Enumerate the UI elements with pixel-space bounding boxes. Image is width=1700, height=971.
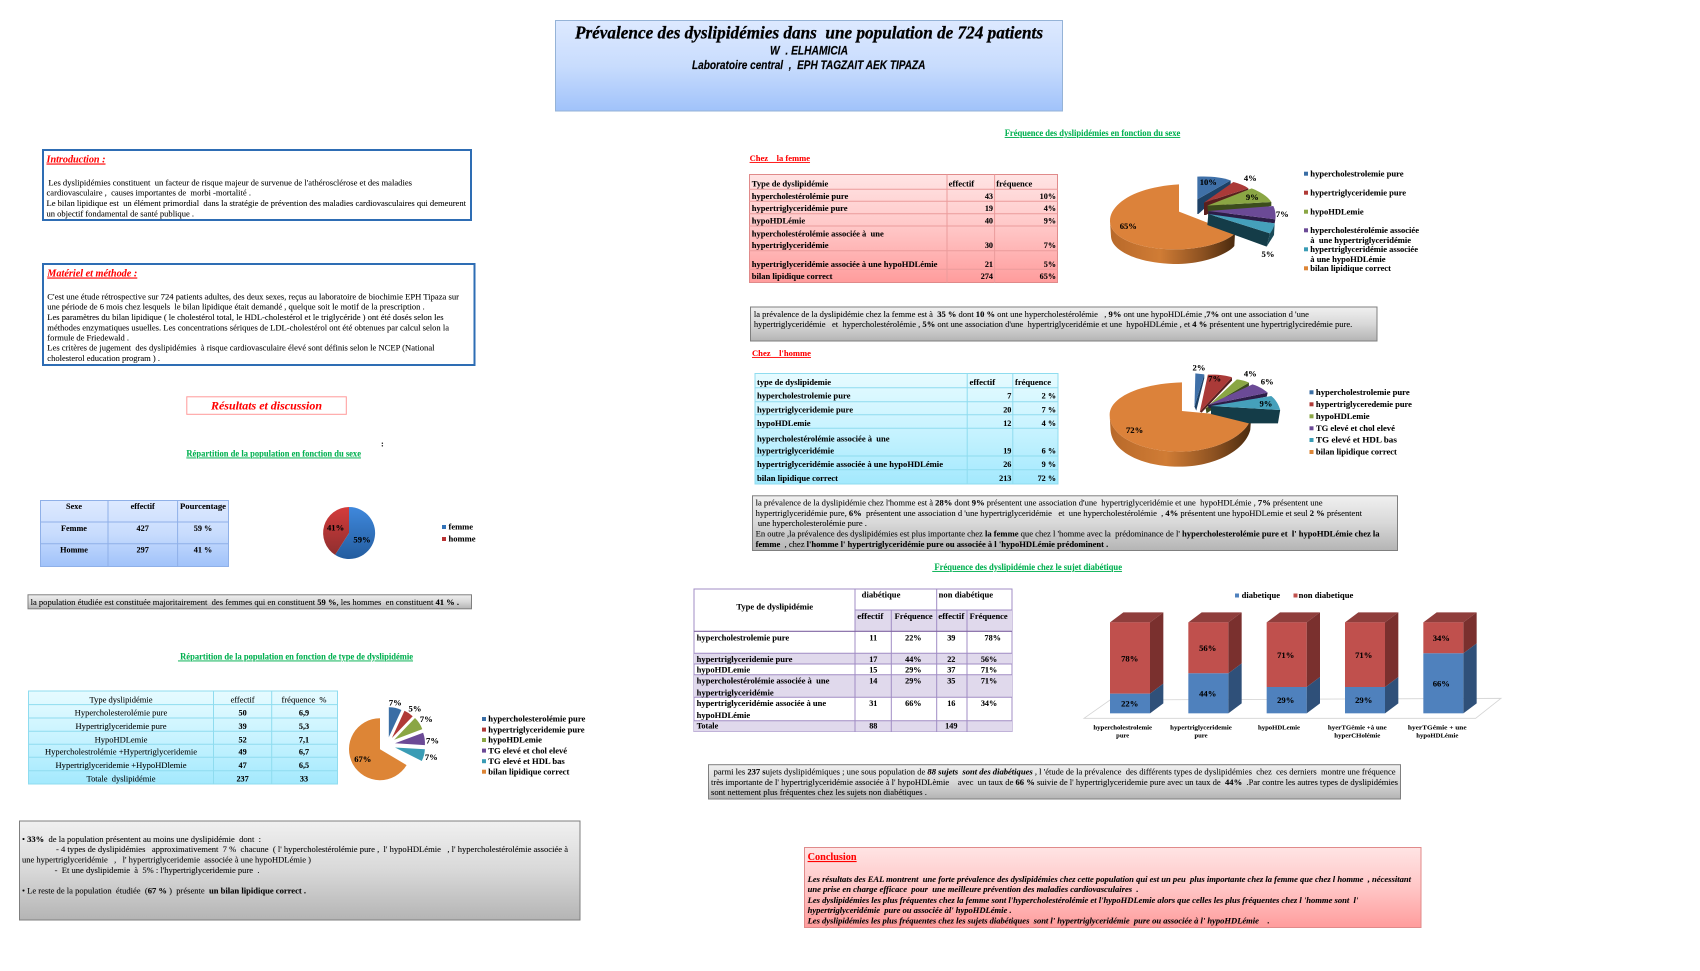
table: femme: effectif — [949, 180, 974, 188]
author: W . ELHAMICIA — [770, 44, 848, 58]
table: diabétiques: hypertriglyceridemie pure — [697, 655, 793, 664]
table: diabétiques: 14 — [869, 676, 877, 686]
pie chart 3D: homme: 2% — [1193, 362, 1205, 372]
table: homme: fréquence — [1015, 378, 1051, 387]
pie chart 3D: homme: 7% — [1208, 374, 1221, 384]
pie chart: types de dyslipidémie: 7% — [426, 735, 439, 745]
bar value labels: 34% — [1433, 633, 1450, 643]
legend: types de dyslipidémie: hypoHDLemie — [488, 736, 542, 745]
category labels: hyerTGémie + une — [1408, 724, 1467, 732]
legend: femme: à une hypertriglyceridémie — [1310, 236, 1411, 245]
table: homme: hypertriglyceridémie associée à une hypoHDLémie — [757, 460, 943, 469]
legend: types de dyslipidémie: bilan lipidique correct — [488, 767, 570, 776]
table: population par sexe: 297 — [137, 546, 149, 555]
table: homme: hypercholestrolemie pure — [757, 392, 851, 400]
legend: femme: bilan lipidique correct — [1310, 264, 1391, 273]
pie chart 3D: homme: 72% — [1126, 425, 1143, 435]
table: types de dyslipidémie: HypoHDLemie — [95, 735, 148, 744]
table: homme: hypoHDLemie — [757, 419, 811, 428]
bar value labels: 71% — [1355, 650, 1372, 660]
table: diabétiques: 39 — [947, 634, 955, 642]
bar value labels: 66% — [1433, 678, 1450, 688]
table: types de dyslipidémie: 237 — [236, 774, 249, 783]
conclusion text: hypertriglyceridémie pure ou associée àl' hypoHDLémie . — [808, 906, 1012, 915]
méthode text: cholesterol education program ) . — [47, 354, 160, 363]
pie chart 3D: homme: 4% — [1244, 368, 1257, 378]
callout: sujets diabétiques: sont nettement plus fréquentes chez les sujets non diabétiques . — [711, 788, 927, 797]
heading: fréquence chez le diabétique: Fréquence des dyslipidémie chez le sujet diabétique — [932, 562, 1122, 572]
subheading: chez l'homme: Chez l'homme — [752, 348, 811, 358]
table: femme — [750, 174, 1058, 282]
méthode text: formule de Friedewald . — [47, 334, 129, 343]
table: diabétiques: 17 — [869, 655, 877, 664]
title banner — [556, 20, 1062, 111]
category labels: hyperCHolémie — [1334, 732, 1380, 740]
category labels: hypercholestrolemie — [1093, 724, 1152, 732]
table: diabétiques: 22 — [947, 655, 955, 664]
conclusion text — [807, 875, 1412, 926]
legend: sexe: homme — [448, 535, 476, 544]
méthode text: méthodes enzymatiques usuelles. Les concentrations sériques de LDL-cholestérol ont été obtenues par calcul selon la — [47, 323, 449, 332]
table: homme: 2 % — [1042, 392, 1056, 400]
section heading: résultats et discussion — [187, 397, 346, 414]
table: diabétiques: hypoHDLemie — [697, 666, 751, 674]
pie chart 3D: femme: 10% — [1200, 177, 1217, 187]
callout: répartition sexe: la population étudiée est constituée majoritairement des femmes qui en constituent 59 %, les hommes en constituent 41 % . — [31, 598, 459, 607]
bar value labels: 44% — [1199, 688, 1216, 698]
table: diabétiques: Totale — [697, 722, 719, 730]
table: femme: 10% — [1040, 192, 1056, 201]
table: types de dyslipidémie: Hypercholestrolémie +Hypertriglyceridemie — [45, 748, 197, 757]
table: population par sexe: effectif — [131, 502, 155, 511]
table: femme: 19 — [985, 204, 993, 213]
table: femme: hypertriglyceridémie — [752, 241, 829, 250]
conclusion text: Les résultats des EAL montrent une forte prévalence des dyslipidémies chez cette population qui est un peu plus importante chez la femme que chez l homme , nécessitant — [807, 875, 1412, 884]
table: femme: hypertriglyceridémie associée à une hypoHDLémie — [752, 260, 938, 269]
table: diabétiques: hypercholestrolemie pure — [697, 634, 790, 642]
pie chart: types de dyslipidémie — [349, 698, 439, 780]
callout: prévalence homme: En outre ,la prévalence des dyslipidémies est plus importante chez la femme que chez l 'homme avec la prédominance de l' hypercholesterolémie pure et l' hypoHDLémie chez la — [756, 530, 1380, 538]
table: types de dyslipidémie: 7,1 — [299, 735, 309, 744]
table: diabétiques: 31 — [869, 699, 877, 708]
table: diabétiques: Fréquence — [895, 612, 933, 621]
pie chart: sexe — [323, 507, 375, 559]
table: diabétiques: 35 — [947, 676, 955, 686]
conclusion text: Les dyslipidémies les plus fréquentes chez les sujets diabétiques sont l' hypertriglyceridémie pure ou associée à l' hypoHDLémie . — [807, 916, 1270, 926]
callout: prévalence homme: femme , chez l'homme l' hypertriglyceridémie pure ou associée à l 'hypoHDLémie prédominent . — [756, 540, 1108, 549]
main title: Prévalence des dyslipidémies dans une population de 724 patients — [574, 22, 1043, 42]
table: diabétiques: Type de dyslipidémie — [736, 602, 813, 612]
pie chart: sexe: 41% — [327, 522, 344, 532]
callout: synthèse des dyslipidémies: - Et une dyslipidemie à 5% : l'hypertriglyceridemie pure . — [55, 866, 260, 875]
bar value labels: 29% — [1355, 695, 1372, 705]
callout: sujets diabétiques: parmi les 237 sujets dyslipidémiques ; une sous population de 88 sujets sont des diabétiques , l 'étude de la prévalence des différents types de dyslipidémies chez ces derniers montre une fréquence — [714, 768, 1396, 776]
table: types de dyslipidémie: 52 — [239, 735, 247, 744]
pie chart 3D: homme — [1110, 362, 1280, 467]
table: diabétiques: 78% — [985, 634, 1001, 642]
table: homme: hypercholestérolémie associée à une — [757, 434, 890, 444]
legend: femme: hypoHDLemie — [1310, 207, 1364, 216]
table: diabétiques: 11 — [869, 634, 877, 642]
category labels: hypertriglyceridemie — [1170, 724, 1232, 732]
conclusion heading: Conclusion — [808, 852, 857, 863]
callout: prévalence homme: hypertriglyceridémie pure, 6% présentent une association d 'une hypertriglyceridémie et une hypercholestérolémie , 4% présentent une hypoHDLemie et seul 2 % présentent — [756, 509, 1363, 518]
legend: femme: à une hypoHDLémie — [1310, 255, 1386, 264]
callout: prévalence homme — [752, 496, 1398, 550]
pie chart: types de dyslipidémie: 7% — [420, 714, 433, 724]
table: population par sexe: 41 % — [194, 546, 212, 555]
table: femme: 4% — [1044, 204, 1056, 213]
table: homme: 213 — [999, 474, 1011, 483]
section heading: résultats et discussion: Résultats et discussion — [210, 398, 322, 412]
callout: sujets diabétiques — [708, 765, 1400, 799]
table: diabétiques: Fréquence — [970, 612, 1008, 621]
table: types de dyslipidémie: 33 — [300, 774, 308, 783]
bar chart: diabétique / non diabétique — [1084, 591, 1501, 740]
table: diabétiques: hypercholestérolémie associée à une — [697, 676, 830, 686]
heading: fréquence selon le sexe: Fréquence des dyslipidémies en fonction du sexe — [1005, 128, 1180, 138]
table: population par sexe: 427 — [137, 524, 149, 533]
table: population par sexe: Femme — [61, 524, 87, 533]
table: types de dyslipidémie: Type dyslipidémie — [90, 695, 153, 704]
table: types de dyslipidémie: fréquence % — [282, 695, 327, 704]
table: homme: 9 % — [1042, 460, 1056, 469]
table: types de dyslipidémie: Hypertriglyceridemie +HypoHDlemie — [56, 761, 187, 770]
legend: types de dyslipidémie: hypercholesterolémie pure — [488, 715, 586, 724]
méthode text — [47, 292, 459, 363]
panel: conclusion — [804, 848, 1421, 928]
conclusion text: une prise en charge efficace pour une meilleure prévention des maladies cardiovasculaires . — [808, 885, 1139, 894]
table: types de dyslipidémie: 6,5 — [299, 761, 309, 770]
legend: sexe — [442, 523, 476, 544]
table: homme: 12 — [1003, 419, 1011, 428]
méthode heading: Matériel et méthode : — [46, 268, 137, 280]
table: femme: 30 — [985, 241, 993, 250]
table: types de dyslipidémie: Hypercholesterolémie pure — [75, 709, 168, 718]
table: types de dyslipidémie: 49 — [239, 748, 247, 757]
callout: synthèse des dyslipidémies: • 33% de la population présentent au moins une dyslipidémie dont : — [22, 835, 261, 844]
pie chart 3D: femme: 9% — [1246, 192, 1259, 202]
table: diabétiques: diabétique — [862, 590, 901, 600]
bar value labels — [1121, 633, 1450, 708]
legend: femme: hypertriglyceridemie pure — [1310, 188, 1406, 197]
table: types de dyslipidémie: effectif — [231, 695, 255, 704]
méthode text: C'est une étude rétrospective sur 724 patients adultes, des deux sexes, reçus au laboratoire de biochimie EPH Tipaza sur — [47, 292, 459, 301]
category labels: pure — [1116, 732, 1129, 740]
chart legend: diabetique — [1242, 591, 1280, 600]
introduction text: Les dyslipidémies constituent un facteur de risque majeur de survenue de l'athérosclérose et des maladies — [48, 178, 412, 187]
table: femme: 7% — [1044, 241, 1056, 250]
callout: sujets diabétiques: très importante de l' hypertriglyceridémie associée à l' hypoHDLèmie avec un taux de 66 % suivie de l' hypertriglyceridemie pure avec un taux de 44% .Par contre les autres types de dyslipidémies — [711, 778, 1398, 787]
table: diabétiques: 56% — [981, 655, 997, 664]
table: femme: hypercholestérolémie pure — [752, 192, 849, 201]
conclusion text: Les dyslipidémies les plus fréquentes chez la femme sont l'hypercholestérolémie et l'hypoHDLemie alors que celles les plus fréquentes chez l 'homme sont l' — [807, 896, 1359, 905]
table: population par sexe: Homme — [60, 546, 88, 555]
table: homme: 20 — [1003, 406, 1011, 414]
legend: types de dyslipidémie: TG elevé et chol elevé — [488, 746, 567, 755]
table: homme — [755, 374, 1058, 484]
table: population par sexe: Pourcentage — [180, 502, 226, 511]
table: femme: hypertriglyceridémie pure — [752, 204, 848, 213]
table: homme: type de dyslipidemie — [757, 378, 831, 387]
panel: matériel et méthode — [43, 264, 474, 365]
legend: types de dyslipidémie — [482, 715, 586, 776]
table: homme: effectif — [970, 378, 995, 387]
callout: répartition sexe — [28, 595, 472, 609]
table: types de dyslipidémie: 6,9 — [299, 709, 309, 718]
table: diabétiques: 29% — [905, 666, 921, 674]
table: types de dyslipidémie: 6,7 — [299, 748, 309, 757]
table: diabétiques: 71% — [981, 666, 997, 674]
table: diabétiques: 88 — [869, 722, 877, 730]
callout: prévalence homme: la prévalence de la dyslipidémie chez l'homme est à 28% dont 9% présentent une association d'une hypertriglyceridémie et une hypoHDLémie , 7% présentent une — [756, 498, 1323, 508]
category labels: hypoHDLemie — [1258, 724, 1300, 732]
table: homme: hypertriglyceridémie — [757, 446, 834, 456]
bar value labels: 29% — [1277, 695, 1294, 705]
pie chart: types de dyslipidémie: 5% — [409, 703, 421, 713]
pie chart: types de dyslipidémie: 7% — [389, 698, 402, 708]
table: femme: bilan lipidique correct — [752, 272, 833, 281]
legend: homme: hypoHDLemie — [1316, 412, 1370, 421]
table: diabétiques: non diabétique — [939, 590, 993, 600]
table: homme: 4 % — [1042, 419, 1056, 428]
legend: homme: TG elevé et HDL bas — [1316, 436, 1397, 445]
table: homme: 72 % — [1038, 474, 1056, 483]
table: diabétiques: 66% — [905, 699, 921, 708]
callout: synthèse des dyslipidémies: une hypertriglyceridémie , l' hypertriglyceridemie associée à une hypoHDLémie ) — [22, 855, 311, 864]
pie chart 3D: femme: 7% — [1276, 209, 1289, 219]
table: diabétiques: hypoHDLémie — [697, 711, 751, 720]
callout: prévalence homme: une hypercholesterolémie pure . — [758, 519, 867, 528]
callout: prévalence femme: la prévalence de la dyslipidémie chez la femme est à 35 % dont 10 % ont une hypercholestérolémie , 9% ont une hypoHDLémie ,7% ont une association d 'une — [754, 310, 1309, 319]
table: diabétiques: 37 — [947, 666, 955, 674]
table: femme: 40 — [985, 216, 993, 226]
chart legend: non diabetique — [1299, 591, 1354, 600]
category labels: hypoHDLémie — [1416, 732, 1458, 740]
méthode text: Les critères de jugement des dyslipidémies à risque cardiovasculaire élevé sont définis selon le NCEP (National — [47, 344, 435, 353]
table: femme: 21 — [985, 260, 993, 269]
legend: femme: hypercholestérolémie associée — [1310, 226, 1419, 235]
pie chart 3D: femme — [1110, 173, 1289, 264]
méthode text: une période de 6 mois chez lesquels le bilan lipidique était demandé , quelque soit le motif de la prescription . — [47, 303, 425, 312]
table: types de dyslipidémie: Totale dyslipidémie — [86, 774, 156, 783]
stacked 3D bars — [1084, 612, 1501, 718]
bar value labels: 22% — [1121, 698, 1138, 708]
pie chart 3D: femme: 4% — [1244, 173, 1257, 183]
table: femme: Type de dyslipidémie — [752, 180, 829, 188]
table: femme: 274 — [981, 272, 993, 281]
table: population par sexe: Sexe — [66, 502, 82, 511]
table: homme: 6 % — [1042, 446, 1056, 456]
table: diabétiques: 16 — [947, 699, 955, 708]
category labels — [1093, 724, 1467, 740]
legend: types de dyslipidémie: hypertriglyceridemie pure — [488, 725, 585, 734]
introduction heading: Introduction : — [46, 154, 106, 166]
legend: types de dyslipidémie: TG elevé et HDL bas — [488, 757, 565, 766]
table: diabétiques: hypertriglyceridémie associée à une — [697, 699, 827, 708]
table: types de dyslipidémie: Hypertriglyceridemie pure — [76, 722, 167, 731]
legend: homme: hypertriglyceredemie pure — [1316, 400, 1412, 409]
legend: femme — [1304, 169, 1419, 273]
table: diabétiques: effectif — [857, 612, 884, 621]
pie chart: types de dyslipidémie: 7% — [425, 752, 438, 762]
table: diabétiques — [694, 589, 1012, 732]
introduction text: cardiovasculaire , causes importantes de morbi -mortalité . — [46, 189, 251, 198]
table: homme: 19 — [1003, 446, 1011, 456]
category labels: hyerTGémie +à une — [1328, 724, 1387, 732]
table: diabétiques: 22% — [905, 634, 921, 642]
introduction text — [46, 178, 467, 218]
table: diabétiques: 29% — [905, 676, 921, 686]
category labels: pure — [1194, 732, 1208, 740]
heading: répartition par type: Répartition de la population en fonction de type de dyslipidémie — [178, 652, 413, 662]
legend: homme: hypercholestrolemie pure — [1316, 388, 1410, 397]
text: : — [381, 440, 384, 448]
table: homme: 7 — [1007, 392, 1011, 400]
table: diabétiques: 44% — [905, 655, 921, 664]
legend: homme: bilan lipidique correct — [1316, 448, 1397, 457]
callout: synthèse des dyslipidémies: - 4 types de dyslipidémies approximativement 7 % chacune ( l' hypercholestérolémie pure , l' hypoHDLémie , l' hypercholestérolémie associée à — [56, 845, 568, 854]
callout: synthèse des dyslipidémies: • Le reste de la population étudiée ( 67 % ) présente un bilan lipidique correct . — [22, 886, 306, 895]
legend: sexe: femme — [448, 523, 473, 532]
table: types de dyslipidémie: 39 — [239, 722, 247, 731]
table: homme: hypertriglyceridemie pure — [757, 406, 853, 414]
table: homme: 26 — [1003, 460, 1011, 469]
table: types de dyslipidémie: 50 — [239, 709, 247, 718]
callout: prévalence femme: hypertriglyceridémie et hypercholestérolémie , 5% ont une association d'une hypertriglyceridémie et une hypoHDLémie , et 4 % présentent une hypertriglyciredémie pure. — [754, 320, 1352, 329]
table: femme: 9% — [1044, 216, 1056, 226]
table: homme: bilan lipidique correct — [757, 474, 838, 483]
table: diabétiques: effectif — [938, 612, 965, 621]
panel: introduction — [43, 150, 471, 220]
bar value labels: 56% — [1199, 643, 1216, 653]
chart legend — [1235, 591, 1354, 600]
pie chart 3D: homme: 6% — [1261, 376, 1274, 386]
table: femme: fréquence — [996, 180, 1033, 188]
table: diabétiques: hypertriglyceridémie — [697, 688, 774, 698]
table: types de dyslipidémie: 47 — [239, 761, 247, 770]
affiliation: Laboratoire central , EPH TAGZAIT AEK TIPAZA — [692, 58, 925, 72]
table: population par sexe: 59 % — [194, 524, 212, 533]
table: femme: 65% — [1040, 272, 1056, 281]
legend: femme: hypertriglyceridémie associée — [1310, 245, 1418, 254]
pie chart 3D: femme: 65% — [1120, 221, 1137, 231]
table: types de dyslipidémie — [28, 691, 338, 784]
subheading: chez la femme: Chez la femme — [750, 153, 810, 163]
table: diabétiques: 15 — [869, 666, 877, 674]
legend: homme — [1310, 388, 1412, 457]
pie chart 3D: homme: 9% — [1259, 398, 1272, 408]
table: population par sexe — [40, 500, 228, 566]
legend: femme: hypercholestrolemie pure — [1310, 169, 1404, 178]
bar value labels: 71% — [1277, 650, 1294, 660]
pie chart 3D: femme: 5% — [1262, 249, 1274, 259]
legend: homme: TG elevé et chol elevé — [1316, 424, 1395, 433]
introduction text: Le bilan lipidique est un élément primordial dans la stratégie de prévention des maladies cardiovasculaires qui demeurent — [46, 199, 467, 208]
table: types de dyslipidémie: 5,3 — [299, 722, 309, 731]
table: diabétiques: 149 — [945, 722, 957, 730]
table: femme: 5% — [1044, 260, 1056, 269]
méthode text: Les paramètres du bilan lipidique ( le cholestérol total, le HDL-cholestérol et le triglycéride ) ont été dosés selon les — [47, 313, 444, 322]
table: femme: 43 — [985, 192, 993, 201]
pie chart: types de dyslipidémie: 67% — [354, 754, 371, 764]
introduction text: un objectif fondamental de santé publique . — [46, 209, 194, 218]
table: homme: 7 % — [1042, 406, 1056, 414]
pie chart: sexe: 59% — [353, 535, 371, 545]
table: diabétiques: 71% — [981, 676, 997, 686]
table: femme: hypoHDLémie — [752, 216, 805, 226]
callout: synthèse des dyslipidémies — [20, 821, 580, 920]
bar value labels: 78% — [1121, 654, 1138, 664]
table: diabétiques: 34% — [981, 699, 997, 708]
callout: prévalence femme — [750, 307, 1377, 341]
table: femme: hypercholestérolémie associée à une — [752, 230, 884, 238]
heading: répartition par sexe: Répartition de la population en fonction du sexe — [186, 448, 361, 458]
